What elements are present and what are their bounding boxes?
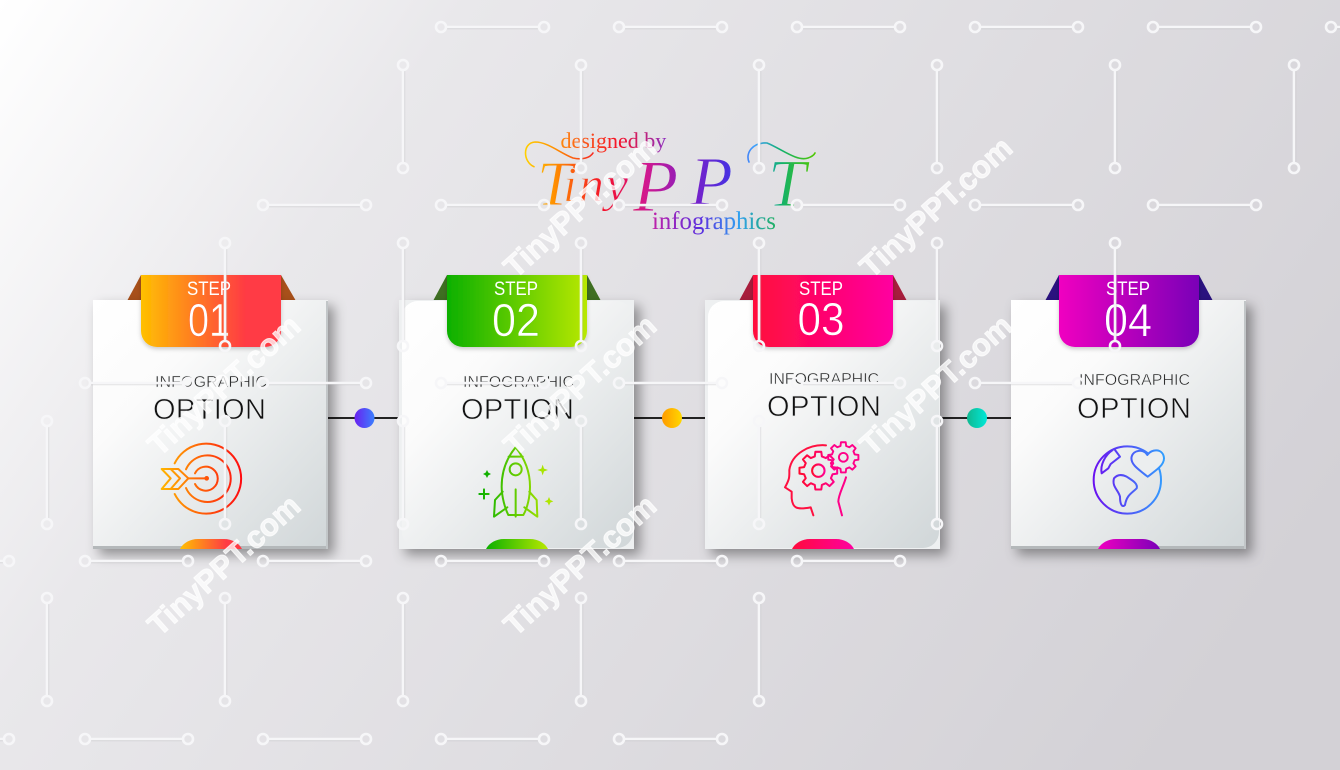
logo: designed by TinyPPT infographics: T <box>768 145 810 221</box>
watermarks <box>141 130 1019 643</box>
watermarks: TinyPPT.com <box>141 488 307 643</box>
text: option 01: OPTION <box>153 394 266 426</box>
panel: step 03 <box>705 275 940 549</box>
logo: designed by TinyPPT infographics: iny <box>563 156 630 212</box>
icon: globe with heart <box>1094 446 1164 514</box>
text: option 02 <box>461 374 574 426</box>
panel: step 02 <box>399 275 634 549</box>
tab: step 04: STEP <box>1106 278 1150 300</box>
text: option 02: INFOGRAPHIC <box>463 374 574 391</box>
watermarks: TinyPPT.com <box>853 130 1019 285</box>
logo: designed by TinyPPT infographics: P <box>632 146 678 228</box>
tab: step 03: STEP <box>799 278 843 300</box>
tab: step 01 <box>141 275 281 347</box>
tab: step 02: 02 <box>492 294 540 346</box>
connector: step 2 to 3 <box>634 408 705 428</box>
logo: designed by TinyPPT infographics: P <box>689 144 733 221</box>
watermarks: TinyPPT.com <box>141 308 307 463</box>
logo: designed by TinyPPT infographics: T <box>537 148 577 219</box>
watermarks: TinyPPT.com <box>497 130 663 285</box>
connector: step 3 to 4 <box>940 408 1011 428</box>
logo: designed by TinyPPT infographics: designed by <box>560 128 666 153</box>
tab: step 04: 04 <box>1104 294 1152 346</box>
text: option 03 <box>767 371 881 423</box>
text: option 01 <box>153 374 267 426</box>
watermarks: TinyPPT.com <box>497 308 663 463</box>
text: option 04: OPTION <box>1077 393 1191 425</box>
logo: designed by TinyPPT infographics <box>526 128 815 235</box>
tab: step 04 <box>1059 275 1199 347</box>
watermarks: TinyPPT.com <box>853 308 1019 463</box>
panel: step 01 <box>93 275 328 549</box>
tab: step 03: 03 <box>798 293 844 345</box>
icon: head with gears <box>785 442 858 515</box>
icon: rocket <box>479 447 553 517</box>
text: option 01: INFOGRAPHIC <box>155 374 267 391</box>
icon: target with arrow <box>162 444 241 514</box>
tab: step 02: STEP <box>494 278 538 300</box>
text: option 03: INFOGRAPHIC <box>769 371 879 388</box>
logo: designed by TinyPPT infographics: infographics <box>652 208 776 235</box>
tab: step 01: STEP <box>187 278 231 300</box>
connector: step 1 to 2 <box>328 408 399 428</box>
text: option 02: OPTION <box>461 394 574 426</box>
panel: step 04 <box>1011 275 1246 549</box>
tab: step 03 <box>753 275 893 347</box>
text: option 04 <box>1077 372 1191 425</box>
watermarks: TinyPPT.com <box>497 488 663 643</box>
tab: step 02 <box>447 275 587 347</box>
tab: step 01: 01 <box>188 294 230 346</box>
text: option 04: INFOGRAPHIC <box>1079 372 1190 389</box>
text: option 03: OPTION <box>767 391 881 423</box>
